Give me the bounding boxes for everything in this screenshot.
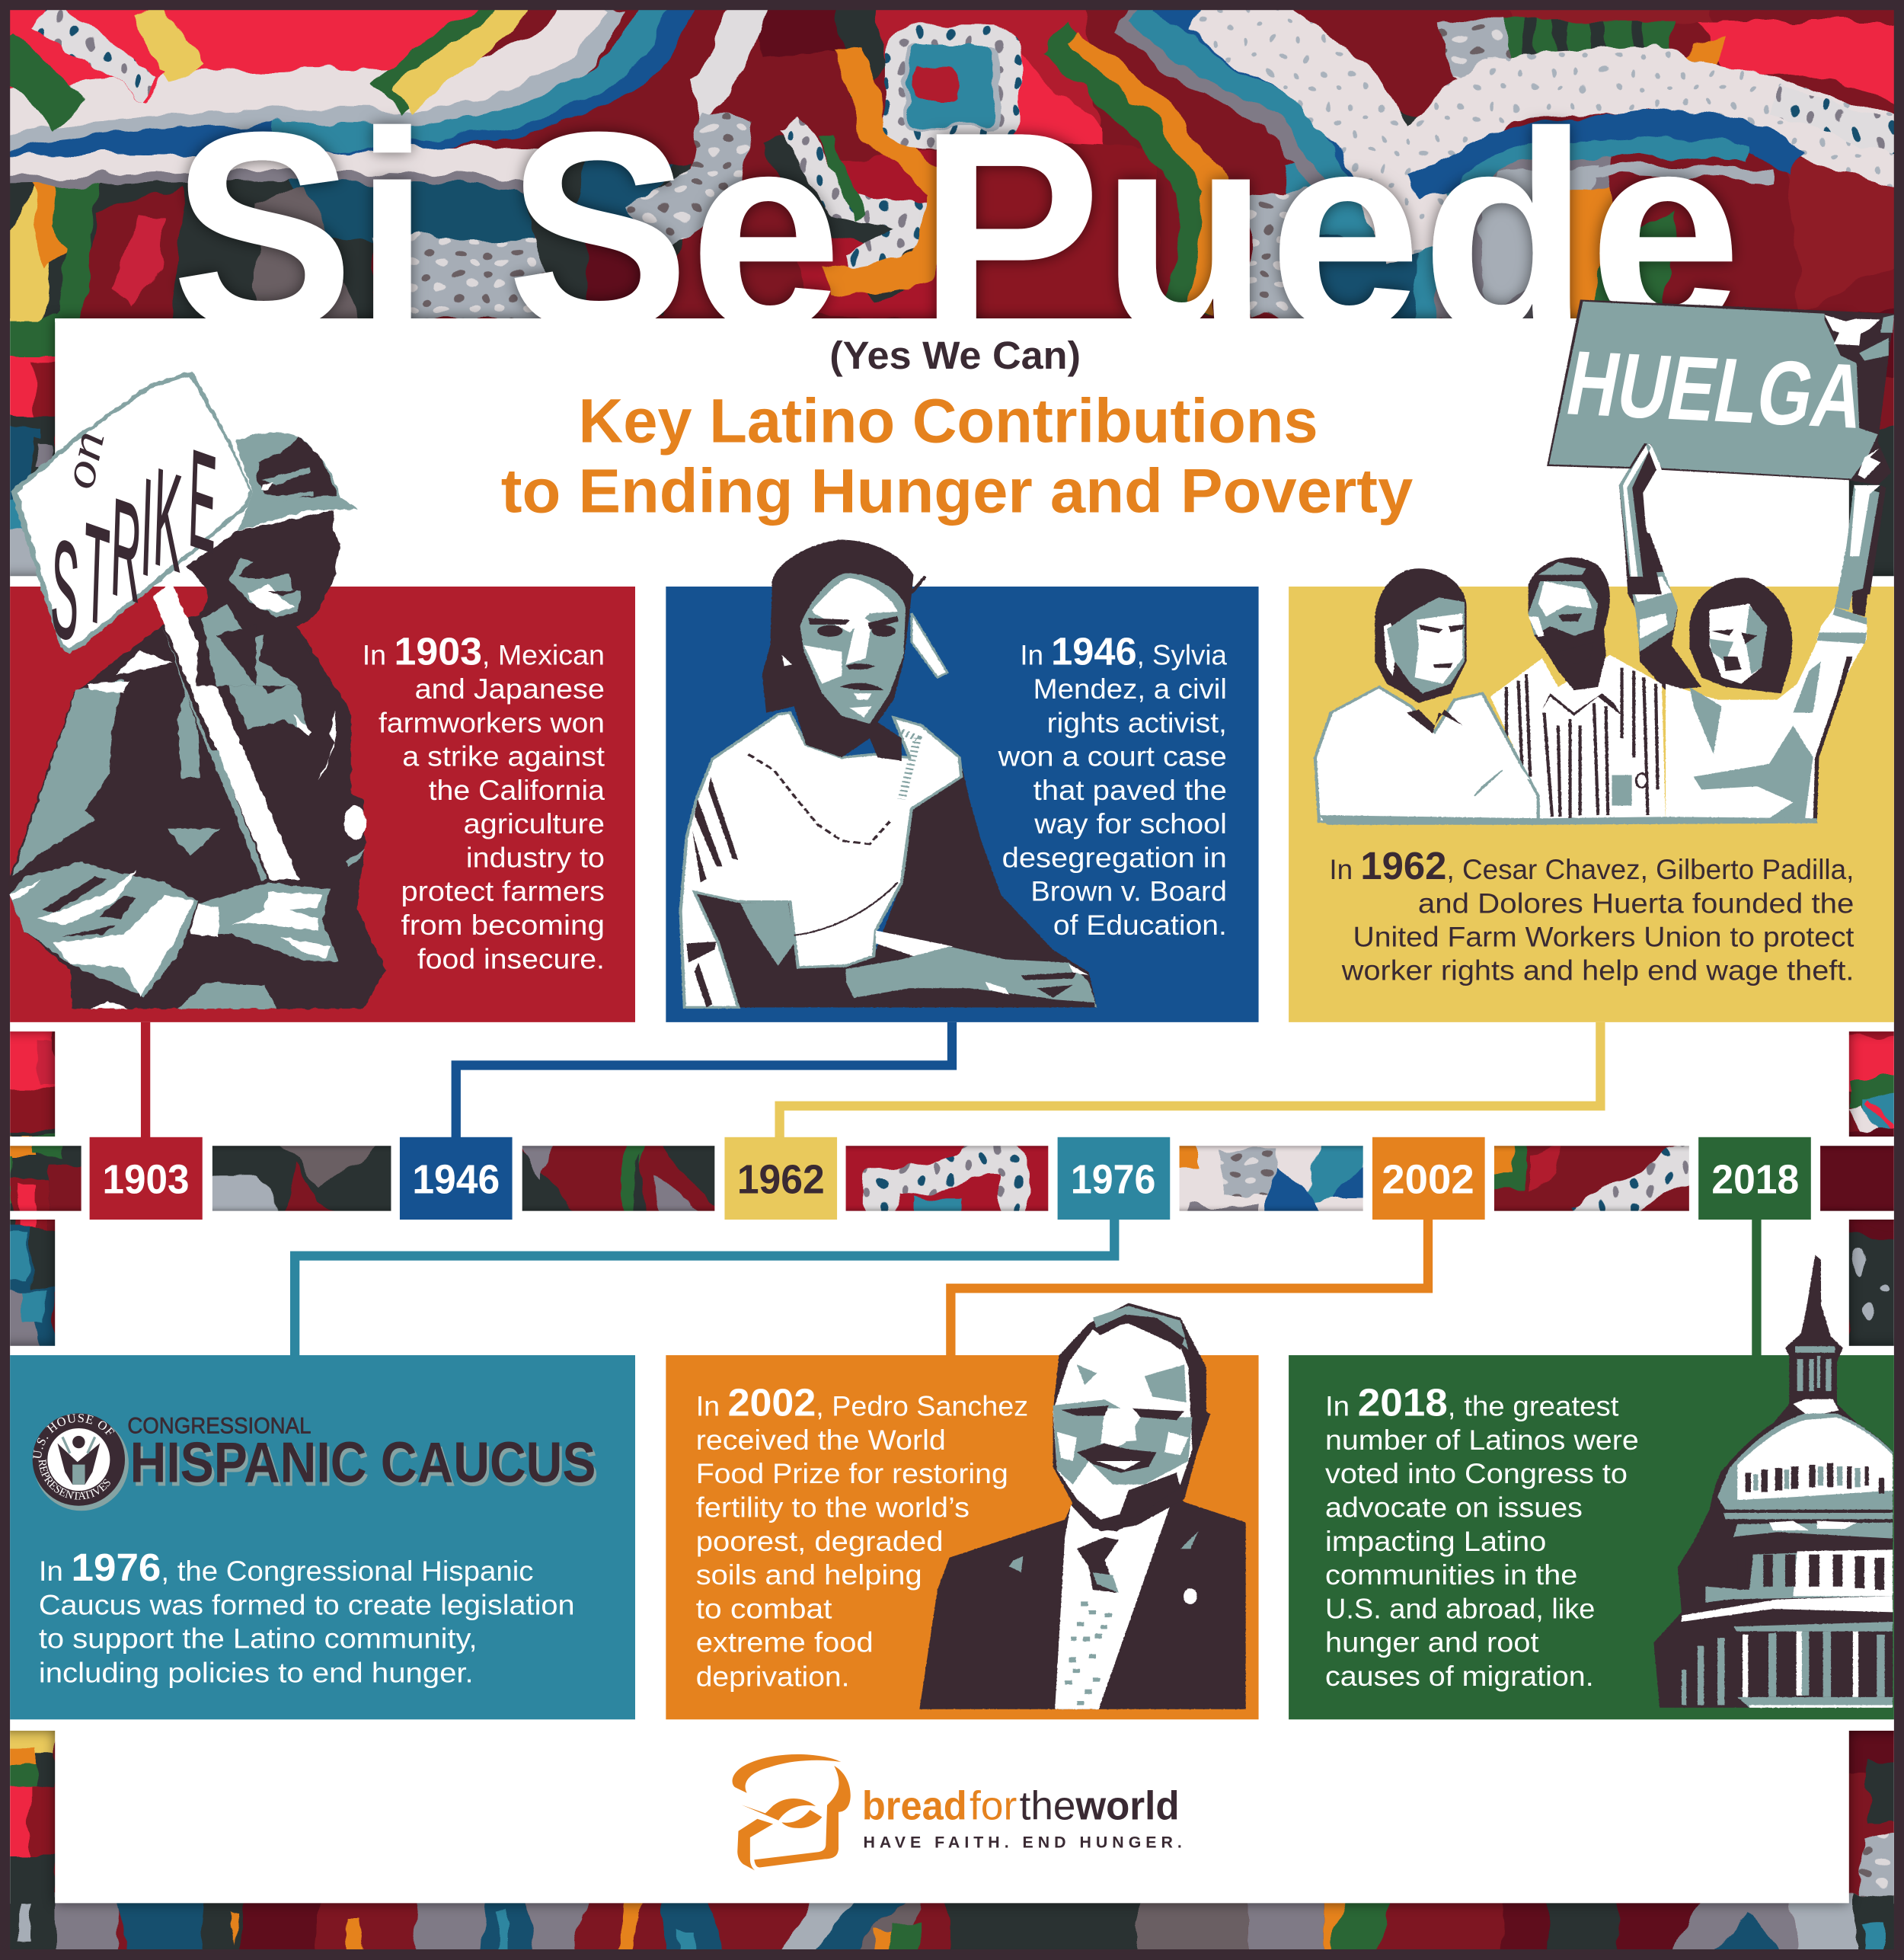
text: 1946: that paved the bbox=[1033, 775, 1227, 806]
heading bbox=[501, 387, 1414, 526]
year: 1962 bbox=[724, 1137, 837, 1220]
text: 1976: Caucus was formed to create legislation bbox=[39, 1589, 575, 1620]
text: 1903: and Japanese bbox=[415, 673, 605, 705]
text: 2018: In 2018, the greatest bbox=[1325, 1381, 1618, 1424]
text: 2018 bbox=[1325, 1381, 1639, 1692]
logo: Congressional Hispanic Caucus wordmark: CONGRESSIONAL bbox=[127, 1414, 311, 1439]
year: 1903 bbox=[90, 1137, 203, 1220]
text: 1946 bbox=[998, 630, 1227, 941]
text: 1903: a strike against bbox=[402, 741, 605, 772]
wordmark: for bbox=[970, 1783, 1017, 1828]
logo: Congressional Hispanic Caucus wordmark: HISPANIC CAUCUS bbox=[133, 1434, 599, 1498]
illustration: Pedro Sanchez portrait bbox=[919, 1303, 1246, 1709]
year: 1946: 1946 bbox=[412, 1157, 500, 1203]
text: 2002: to combat bbox=[696, 1593, 832, 1624]
text: 1903: from becoming bbox=[401, 910, 605, 941]
text: 1903: industry to bbox=[466, 842, 605, 873]
subtitle: (Yes We Can) bbox=[829, 334, 1081, 377]
text: 2018: communities in the bbox=[1325, 1559, 1577, 1591]
icon: House of Representatives seal bbox=[32, 1413, 129, 1511]
text: 2018: advocate on issues bbox=[1325, 1492, 1583, 1523]
illustration: striking farmworker with sign bbox=[9, 371, 386, 1009]
text: 2002: deprivation. bbox=[696, 1661, 849, 1693]
text: 2018: voted into Congress to bbox=[1325, 1458, 1628, 1489]
panel: 1976 Congressional Hispanic Caucus bbox=[10, 1355, 635, 1720]
text: 1962: and Dolores Huerta founded the bbox=[1418, 887, 1854, 919]
illustration: U.S. Capitol dome bbox=[1653, 1255, 1893, 1708]
year: 1976: 1976 bbox=[1071, 1157, 1155, 1203]
text: 1946: rights activist, bbox=[1047, 707, 1227, 738]
text: 1946: way for school bbox=[1033, 808, 1227, 839]
year: 2002: 2002 bbox=[1382, 1157, 1474, 1203]
text: 2018: U.S. and abroad, like bbox=[1325, 1593, 1595, 1624]
text: 2018: hunger and root bbox=[1325, 1627, 1539, 1658]
wordmark: the bbox=[1020, 1783, 1075, 1828]
text: 1903: In 1903, Mexican bbox=[363, 630, 605, 673]
icon: House of Representatives seal: REPRESENTATIVES bbox=[38, 1460, 110, 1500]
heading: to Ending Hunger and Poverty bbox=[501, 457, 1414, 526]
text: 1903: protect farmers bbox=[401, 876, 605, 907]
text: 1946: desegregation in bbox=[1002, 842, 1227, 873]
text: 1903: agriculture bbox=[464, 808, 605, 839]
wordmark bbox=[862, 1783, 1180, 1828]
text: 1976: including policies to end hunger. bbox=[39, 1658, 474, 1689]
text: 2002: fertility to the world’s bbox=[696, 1492, 970, 1523]
timeline year boxes bbox=[90, 1137, 1811, 1220]
illustration: Chavez, Padilla and Huerta bbox=[1315, 533, 1875, 825]
text: 2018: causes of migration. bbox=[1325, 1661, 1594, 1692]
text: 1976: In 1976, the Congressional Hispanic bbox=[39, 1546, 533, 1589]
title merge strip bbox=[55, 318, 1849, 322]
timeline connectors bbox=[145, 1022, 1756, 1357]
sign text: on strike: STRIKE bbox=[49, 420, 219, 672]
strip edge shading bbox=[0, 1138, 1904, 1218]
text: 1946: In 1946, Sylvia bbox=[1020, 630, 1227, 673]
text: 1976 bbox=[39, 1546, 575, 1689]
panel: 2002 Pedro Sanchez bbox=[666, 1303, 1259, 1719]
year: 1946 bbox=[400, 1137, 513, 1220]
text: 2002: Food Prize for restoring bbox=[696, 1458, 1008, 1489]
text: 1946: Mendez, a civil bbox=[1033, 673, 1227, 705]
main title: Si Se Puede bbox=[171, 72, 1742, 388]
text: 1962: worker rights and help end wage theft. bbox=[1341, 955, 1854, 986]
text: 1903: farmworkers won bbox=[379, 707, 605, 738]
sign text: on strike: on bbox=[53, 427, 114, 493]
text: 2002 bbox=[696, 1381, 1028, 1693]
year: 2018: 2018 bbox=[1711, 1157, 1799, 1203]
text: 1903 bbox=[363, 630, 605, 974]
year: 1976 bbox=[1058, 1137, 1170, 1220]
logo: Congressional Hispanic Caucus wordmark: HISPANIC CAUCUS bbox=[130, 1431, 596, 1495]
wordmark: world bbox=[1075, 1783, 1180, 1828]
logo: Congressional Hispanic Caucus wordmark bbox=[127, 1414, 599, 1498]
year: 1962: 1962 bbox=[737, 1157, 825, 1203]
text: 2018: impacting Latino bbox=[1325, 1526, 1546, 1557]
icon: bread loaf with fish bbox=[733, 1754, 851, 1870]
text: 1962: In 1962, Cesar Chavez, Gilberto Padilla, bbox=[1329, 844, 1854, 887]
year: 1903: 1903 bbox=[103, 1157, 190, 1203]
panel: 1903 farmworkers strike bbox=[9, 371, 635, 1022]
panel: 1946 Sylvia Mendez bbox=[666, 539, 1259, 1022]
logo: Bread for the World bbox=[733, 1754, 1182, 1870]
text: 1962: United Farm Workers Union to protect bbox=[1353, 922, 1854, 953]
text: 1946: of Education. bbox=[1053, 910, 1227, 941]
text: 2002: poorest, degraded bbox=[696, 1526, 944, 1557]
year: 2018 bbox=[1698, 1137, 1811, 1220]
panel: 1962 United Farm Workers bbox=[1289, 533, 1894, 1022]
text: 1946: Brown v. Board bbox=[1030, 876, 1227, 907]
panel: 2018 Latinos in Congress bbox=[1289, 1255, 1894, 1719]
text: 2002: In 2002, Pedro Sanchez bbox=[696, 1381, 1028, 1424]
text: 2002: soils and helping bbox=[696, 1559, 922, 1591]
text: 1976: to support the Latino community, bbox=[39, 1623, 478, 1655]
text: 1903: the California bbox=[429, 775, 605, 806]
illustration: Sylvia Mendez portrait bbox=[681, 539, 1097, 1007]
wordmark: bread bbox=[862, 1783, 967, 1828]
text: 1946: won a court case bbox=[998, 741, 1227, 772]
year: 2002 bbox=[1372, 1137, 1485, 1220]
text: 2018: number of Latinos were bbox=[1325, 1424, 1639, 1456]
icon: House of Representatives seal: U.S. HOUSE OF bbox=[33, 1414, 114, 1458]
text: 1962 bbox=[1329, 844, 1854, 986]
text: 2002: extreme food bbox=[696, 1627, 874, 1658]
heading: Key Latino Contributions bbox=[579, 387, 1318, 456]
text: 2002: received the World bbox=[696, 1424, 946, 1456]
text: 1903: food insecure. bbox=[417, 943, 605, 974]
illustration: Huelga sign and raised arms bbox=[1547, 299, 1894, 594]
tagline: HAVE FAITH. END HUNGER. bbox=[864, 1834, 1182, 1852]
